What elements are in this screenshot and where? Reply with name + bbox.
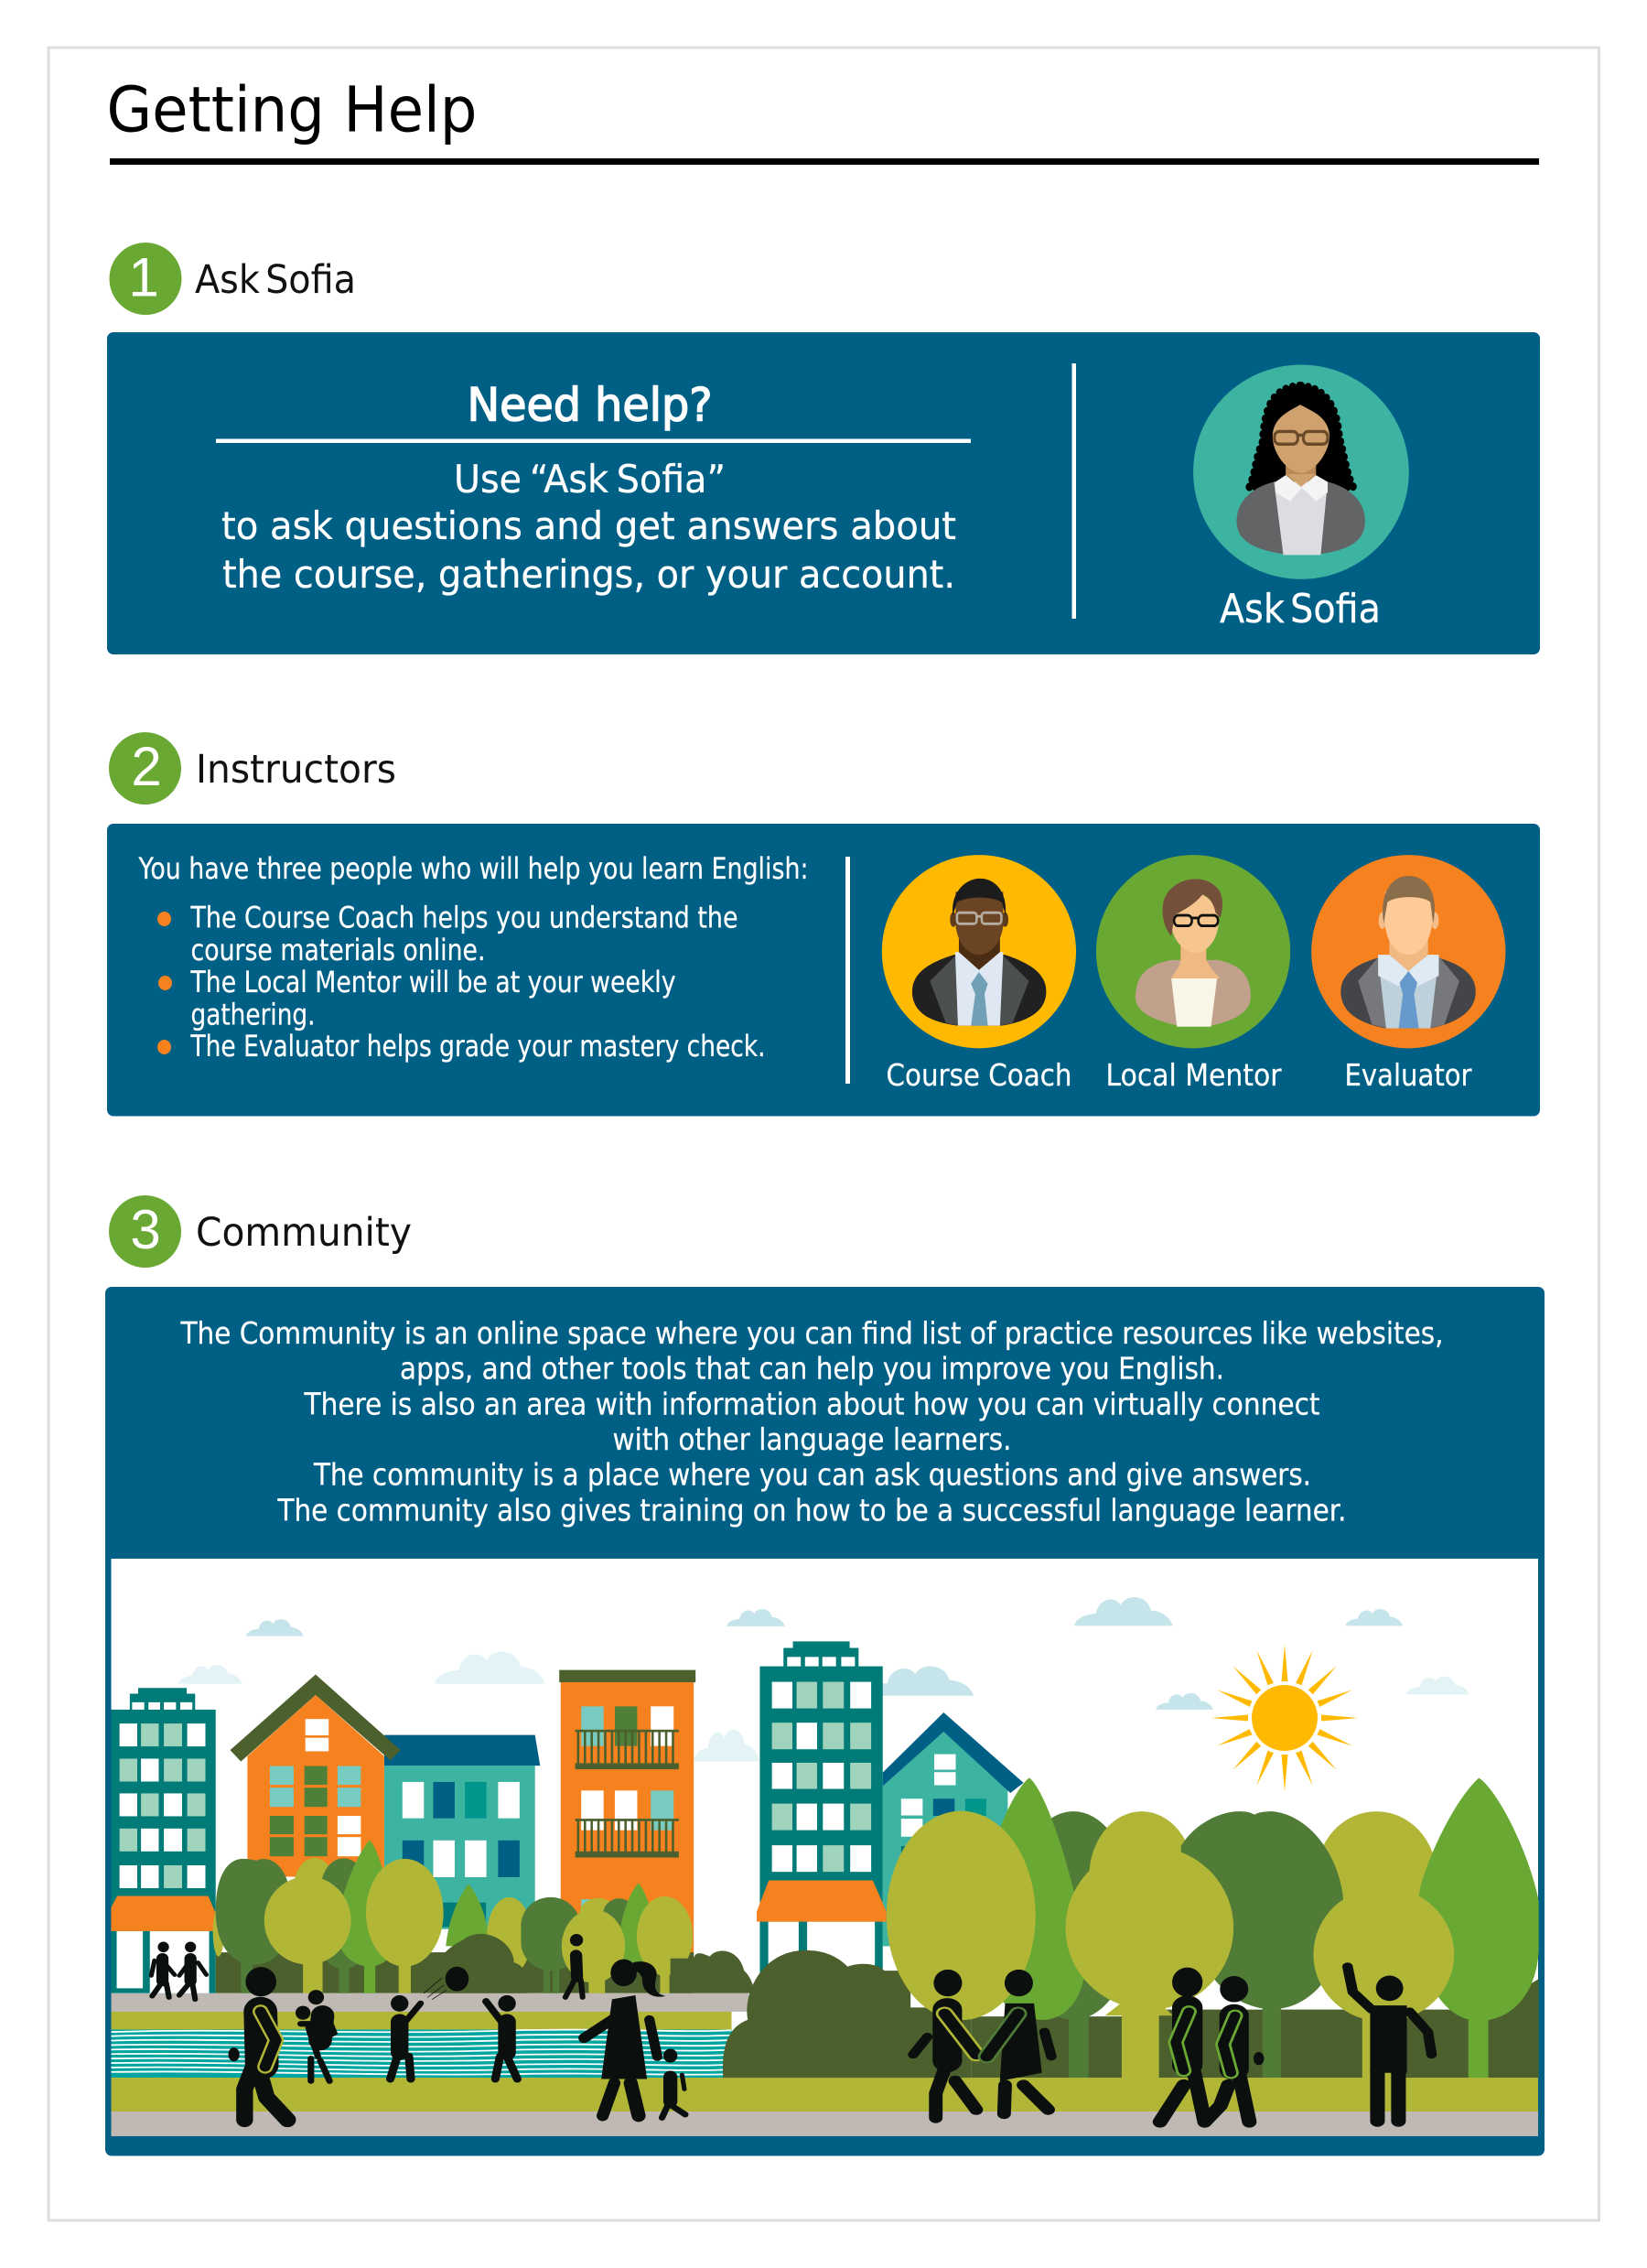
bullet list: course materials online.: [190, 933, 485, 967]
small child holding hand: [662, 2048, 685, 2118]
bullet list: gathering.: [190, 998, 315, 1032]
orange house: [231, 1675, 401, 1877]
couple holding hands: [913, 1970, 1051, 2118]
section heading: 3 Community: 3: [130, 1199, 161, 1260]
section heading: 2 Instructors: Instructors: [196, 747, 396, 793]
buildings: right group: [757, 1641, 1024, 1977]
avatar: Sofia: [1193, 365, 1409, 579]
bullet list: [157, 901, 765, 1064]
right teal tower: [757, 1641, 887, 1977]
section heading: 1 Ask Sofia: Ask Sofia: [195, 257, 356, 303]
avatar labels: Evaluator: [1345, 1057, 1472, 1093]
waving person: [1348, 1967, 1432, 2121]
community description: The community also gives training on how to be a successful language learner.: [277, 1492, 1347, 1528]
community description: There is also an area with information about how you can virtually connect: [304, 1386, 1320, 1422]
trees: left group: [213, 1840, 754, 1993]
heading rule: [216, 439, 971, 443]
community description: The Community is an online space where you can find list of practice resources like websites,: [180, 1315, 1443, 1351]
need help text: to ask questions and get answers about: [221, 503, 956, 548]
teal apartment: [384, 1735, 540, 1929]
need help text: [221, 457, 956, 597]
avatar labels: [886, 1057, 1472, 1093]
large walker: [228, 1967, 287, 2120]
section heading: 1 Ask Sofia: 1: [128, 247, 159, 308]
avatar label: Ask Sofia: Ask Sofia: [1220, 586, 1381, 632]
section heading: 3 Community: Community: [196, 1210, 412, 1256]
section heading: 3 Community: [109, 1195, 412, 1268]
sun: [1211, 1645, 1358, 1791]
community description: [180, 1315, 1443, 1528]
avatar: Course Coach: [882, 855, 1076, 1048]
tall orange apartment with balconies: [559, 1670, 695, 1960]
need help text: Use “Ask Sofia”: [454, 457, 726, 502]
parent carrying child: [296, 1990, 338, 2081]
need help heading: Need help?: [467, 379, 712, 432]
community description: apps, and other tools that can help you improve you English.: [400, 1351, 1224, 1386]
couple in doorway: [151, 1941, 207, 1999]
need help text: the course, gatherings, or your account.: [222, 552, 955, 597]
avatar: Local Mentor: [1096, 855, 1290, 1048]
people: left group: [151, 1934, 685, 2120]
title: Getting Help: [106, 73, 478, 146]
avatar: Evaluator: [1311, 855, 1505, 1048]
left teal tower: [111, 1688, 219, 1993]
panel divider: [1072, 363, 1076, 619]
avatar labels: Course Coach: [886, 1057, 1072, 1093]
community description: The community is a place where you can ask questions and give answers.: [313, 1457, 1311, 1492]
panel: Community: [105, 1287, 1545, 2156]
buildings: left group: [111, 1670, 695, 1993]
child catching ball: [486, 1995, 517, 2079]
section heading: 2 Instructors: [109, 732, 396, 805]
panel: Ask Sofia: [107, 332, 1540, 654]
large bush and front olive tree: [723, 1811, 1036, 2078]
bullet list: The Evaluator helps grade your mastery check.: [190, 1029, 765, 1064]
section heading: 1 Ask Sofia: [110, 243, 356, 315]
panel: Instructors: [107, 824, 1540, 1117]
people: right group: [913, 1967, 1432, 2122]
clouds: [178, 1597, 1469, 1762]
section heading: 2 Instructors: 2: [131, 736, 162, 797]
two walkers: [1160, 1968, 1264, 2122]
panel divider: [845, 857, 850, 1084]
title: [106, 73, 1539, 165]
small walker: [565, 1934, 583, 1997]
community scene: [111, 1559, 1539, 2136]
trees: right group: [971, 1777, 1539, 2079]
avatar labels: Local Mentor: [1105, 1057, 1282, 1093]
bullet list: The Local Mentor will be at your weekly: [190, 965, 676, 999]
bullet list: The Course Coach helps you understand the: [190, 901, 737, 935]
teal house with blue roof: [883, 1712, 1024, 1946]
child throwing ball: [391, 1967, 468, 2079]
ground: path, grass and river: [111, 1993, 1538, 2136]
woman with ponytail: [584, 1960, 666, 2116]
intro text: You have three people who will help you learn English:: [138, 851, 808, 886]
community description: with other language learners.: [613, 1421, 1012, 1457]
